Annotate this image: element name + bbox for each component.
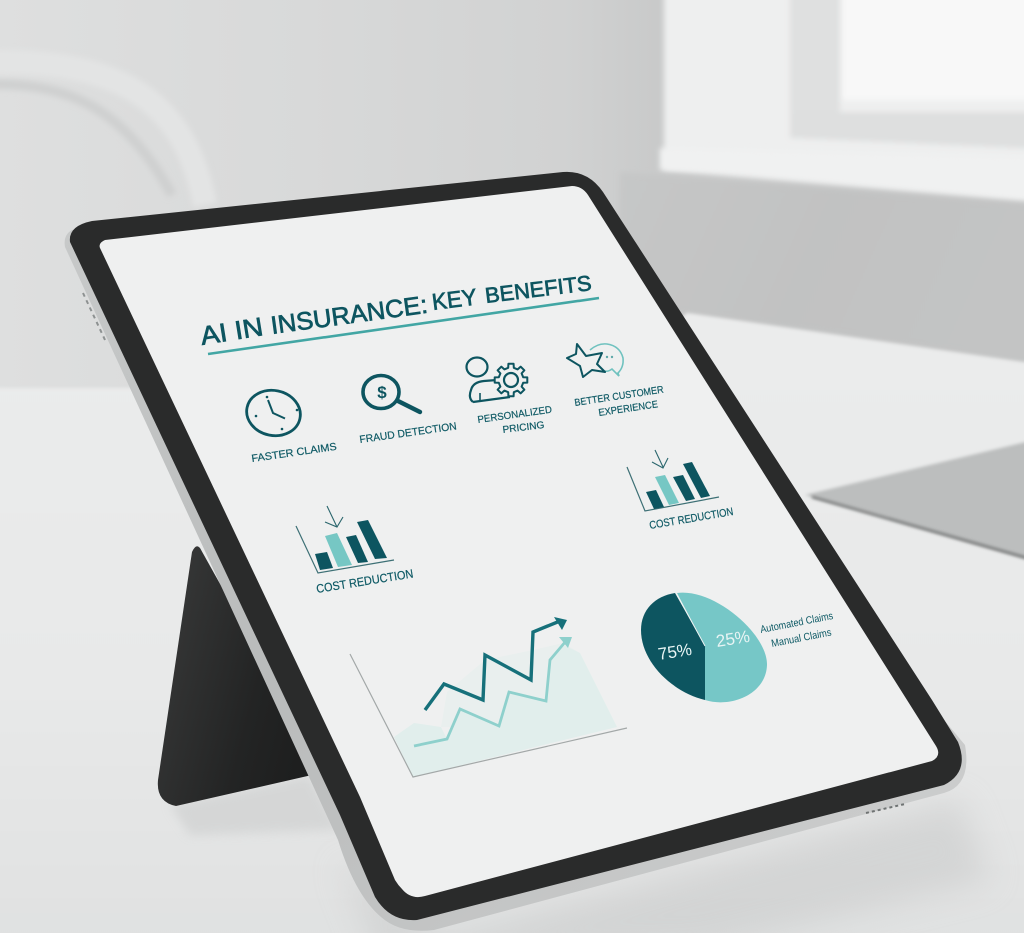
wall band (620, 172, 1024, 368)
chart: cost reduction right (627, 450, 734, 532)
icon: magnifier, fraud detection: FRAUD DETECTION (359, 420, 457, 446)
chart: cost reduction right: COST REDUCTION (648, 506, 734, 532)
icon: person and gear, personalized pricing: PERSONALIZED (477, 405, 553, 426)
icon: person and gear, personalized pricing: PRICING (502, 420, 545, 436)
icon: star and chat, better customer experience (567, 344, 664, 419)
icon: magnifier, fraud detection (359, 376, 457, 446)
icon: star and chat, better customer experience: EXPERIENCE (598, 399, 659, 419)
black bezel (70, 172, 962, 920)
chair back (0, 62, 205, 205)
tablet stand (158, 546, 325, 806)
chart: pie 75% and 25%: 75% (657, 640, 693, 664)
chair back shadow (0, 84, 172, 195)
chart: pie 75% and 25%: 25% (715, 627, 751, 651)
icon: clock, faster claims (242, 385, 338, 465)
infographic content (198, 271, 834, 777)
icon: magnifier, fraud detection: $ (377, 383, 387, 402)
desk (0, 313, 1024, 933)
icon: person and gear, personalized pricing (466, 358, 553, 436)
chart: cost reduction left: COST REDUCTION (315, 566, 414, 596)
tablet body (65, 172, 966, 931)
title: BENEFITS (484, 271, 593, 308)
icon: clock, faster claims: FASTER CLAIMS (251, 441, 338, 465)
laptop (805, 441, 1024, 560)
stand shadow (170, 775, 340, 835)
title (198, 271, 599, 354)
title: INSURANCE: (269, 291, 429, 340)
title: KEY (430, 284, 478, 315)
title: AI IN (198, 311, 265, 351)
icon: star and chat, better customer experience: BETTER CUSTOMER (574, 385, 664, 409)
window sill (660, 148, 1024, 205)
tablet shadow (340, 800, 990, 933)
window (664, 0, 1024, 170)
pie legend (759, 610, 834, 650)
tablet side buttons and speaker (83, 293, 905, 813)
pie legend: Manual Claims (770, 627, 832, 650)
chart: cost reduction left (296, 506, 414, 596)
chart: pie 75% and 25% (641, 593, 834, 702)
chart: rising line graph (350, 617, 627, 777)
pie legend: Automated Claims (759, 610, 834, 636)
silver edge (65, 190, 966, 931)
screen (100, 186, 938, 897)
